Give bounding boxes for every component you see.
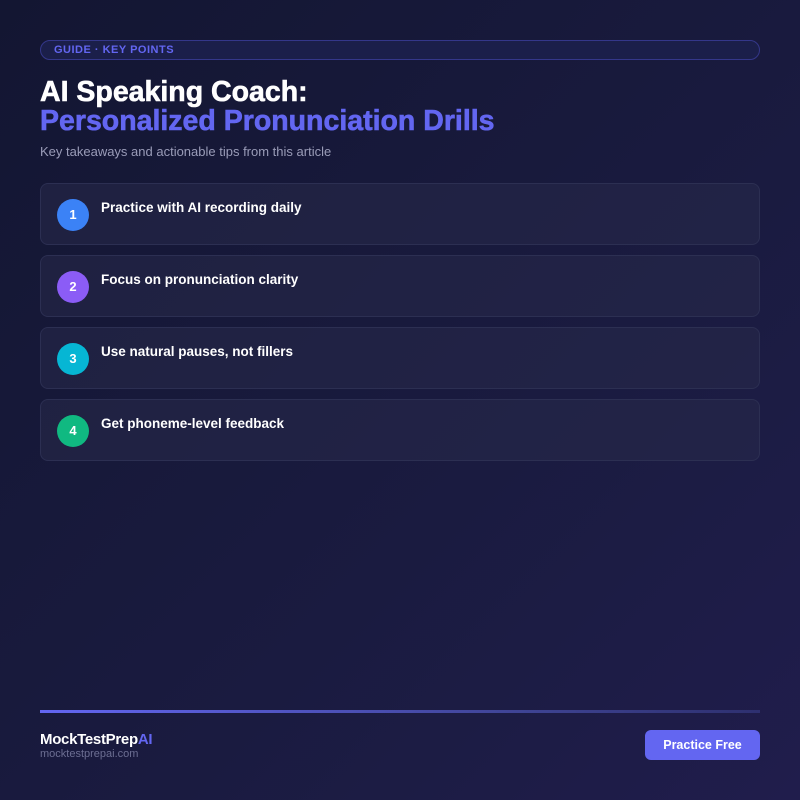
card 4 xyxy=(40,399,760,461)
logo: MockTestPrepAI xyxy=(40,731,152,748)
card 3 xyxy=(40,327,760,389)
url: mocktestprepai.com xyxy=(40,748,138,760)
title: AI Speaking Coach: xyxy=(40,76,308,108)
card 2: Focus on pronunciation clarity xyxy=(101,272,298,287)
subtitle: Key takeaways and actionable tips from this article xyxy=(40,144,331,159)
card 4: 4 xyxy=(69,423,77,438)
badge: GUIDE · KEY POINTS xyxy=(54,44,174,56)
button xyxy=(645,730,760,760)
card 3: 3 xyxy=(69,351,77,366)
badge xyxy=(40,40,760,60)
card 2 xyxy=(40,255,760,317)
card 1: Practice with AI recording daily xyxy=(101,200,302,215)
card 3: Use natural pauses, not fillers xyxy=(101,344,293,359)
button: Practice Free xyxy=(663,738,742,752)
title highlight: Personalized Pronunciation Drills xyxy=(40,105,495,137)
card 1 xyxy=(40,183,760,245)
card 1: 1 xyxy=(69,207,77,222)
card 4: Get phoneme-level feedback xyxy=(101,416,284,431)
card 2: 2 xyxy=(69,279,77,294)
